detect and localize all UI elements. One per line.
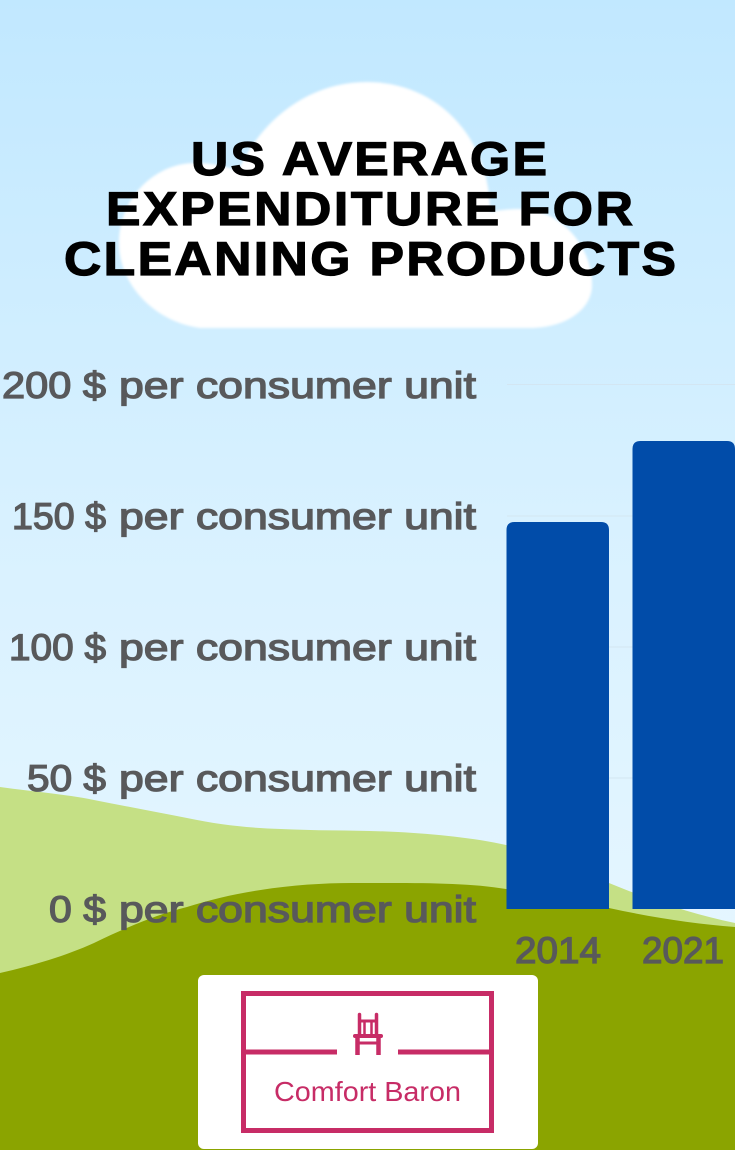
- bar: 2021: [632, 441, 735, 909]
- bar chart: [2, 365, 735, 971]
- x axis label: 2014: 2014: [515, 930, 601, 971]
- title: CLEANING PRODUCTS: [64, 233, 676, 285]
- front hill: dark green: [0, 883, 735, 1150]
- y axis labels: per consumer unit: [119, 365, 477, 406]
- logo wordmark: Comfort Baron: [274, 1076, 461, 1107]
- y axis labels: 50 $: [27, 758, 106, 799]
- y axis labels: 0 $: [49, 889, 106, 930]
- x axis label: 2021: 2021: [642, 930, 724, 971]
- back hill: light green: [0, 787, 735, 1150]
- y axis labels: per consumer unit: [119, 627, 477, 668]
- logo card: [198, 975, 538, 1149]
- icon: chair: [355, 1014, 381, 1055]
- bar: 2014: [506, 522, 609, 909]
- logo frame: [244, 994, 492, 1130]
- y axis labels: per consumer unit: [119, 496, 477, 537]
- cloud: [119, 82, 592, 328]
- y axis labels: per consumer unit: [119, 889, 477, 930]
- y axis labels: 100 $: [9, 627, 106, 668]
- title: EXPENDITURE FOR: [106, 183, 633, 235]
- title: [64, 133, 676, 285]
- y axis labels: [2, 365, 477, 930]
- y axis labels: per consumer unit: [119, 758, 477, 799]
- y axis labels: 200 $: [2, 365, 106, 406]
- y axis labels: 150 $: [12, 496, 106, 537]
- title: US AVERAGE: [191, 133, 547, 185]
